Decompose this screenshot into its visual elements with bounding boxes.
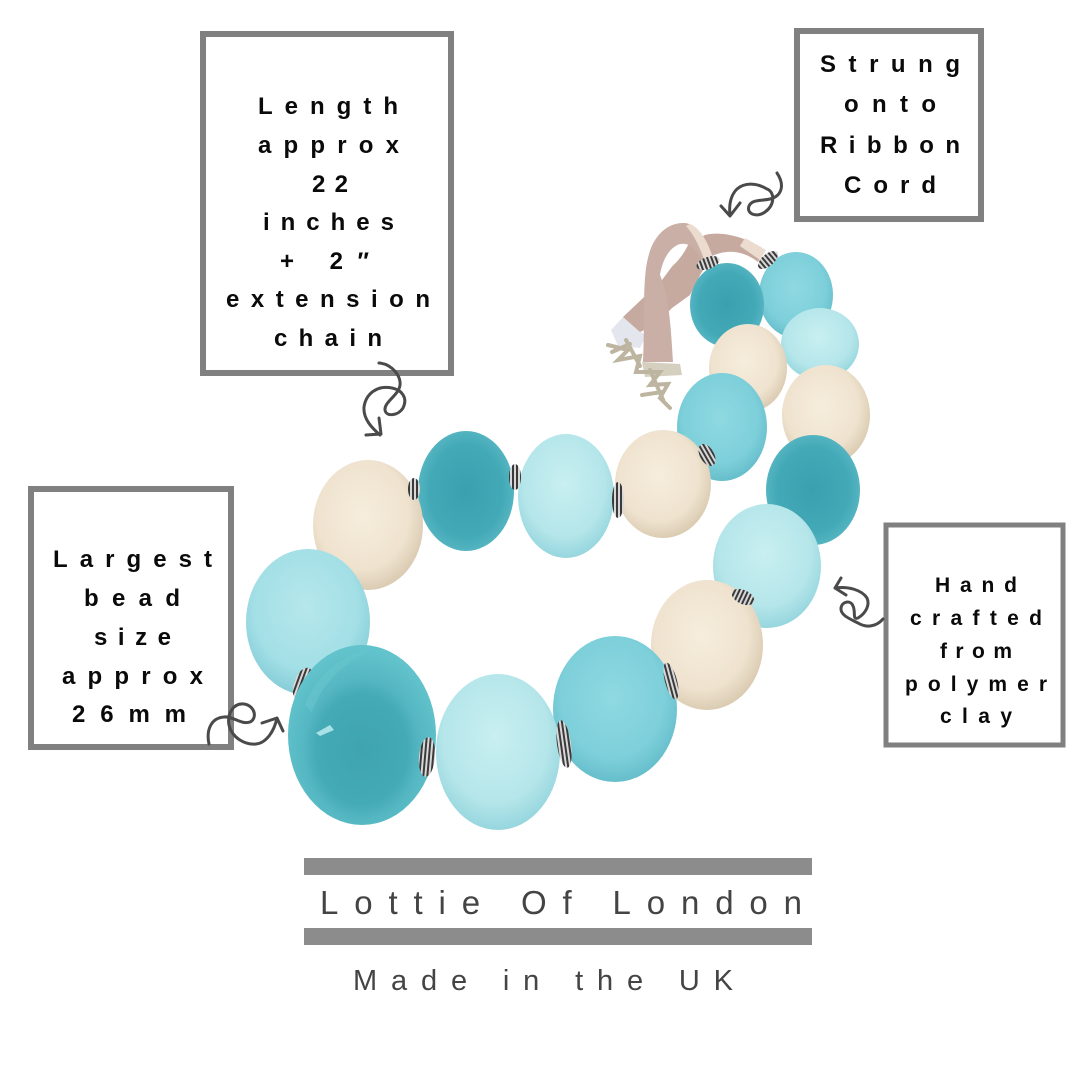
bead: cream left bbox=[313, 460, 423, 590]
callout box: length: inches bbox=[263, 209, 394, 236]
bead: teal right bbox=[766, 435, 860, 545]
callout box: ribbon cord: Strung bbox=[820, 51, 960, 78]
callout box: bead size bbox=[31, 489, 231, 747]
bead: teal inner bbox=[418, 431, 514, 551]
bead: mid blue bottom bbox=[553, 636, 677, 782]
top bar bbox=[304, 858, 812, 875]
bead: largest teal bbox=[288, 645, 436, 825]
spacer bead: behind largest bead bbox=[289, 665, 317, 703]
callout box: ribbon cord bbox=[797, 31, 981, 219]
bead: mid blue inner bbox=[677, 373, 767, 481]
bead: cream inner bbox=[615, 430, 711, 538]
brand block bbox=[304, 858, 812, 997]
bead: cream upper left bbox=[709, 324, 787, 412]
bead: pale left large bbox=[246, 549, 370, 695]
callout box: length bbox=[203, 34, 451, 373]
callout box: bead size: 26mm bbox=[72, 701, 186, 728]
tagline: Made in the UK bbox=[353, 965, 734, 997]
callout box: ribbon cord: Cord bbox=[844, 172, 936, 199]
arrow: to largest bead bbox=[208, 704, 283, 744]
callout box: length: extension bbox=[226, 286, 430, 313]
callout box: polymer clay: polymer bbox=[905, 673, 1047, 696]
callout box: bead size: Largest bbox=[53, 546, 212, 573]
necklace photo bbox=[246, 223, 870, 830]
bead: pale inner bbox=[518, 434, 614, 558]
callout box: polymer clay bbox=[886, 525, 1063, 745]
brand name: Lottie Of London bbox=[320, 884, 802, 921]
callout box: polymer clay: Hand bbox=[935, 574, 1017, 597]
callout box: bead size: size bbox=[94, 624, 171, 651]
spacer beads bbox=[408, 248, 781, 778]
bead: mid blue top bbox=[759, 252, 833, 338]
callout box: polymer clay: crafted bbox=[910, 607, 1042, 630]
arrow: to ribbon bbox=[721, 173, 781, 216]
callout box: bead size: bead bbox=[84, 585, 180, 612]
bead: cream lower right bbox=[651, 580, 763, 710]
ribbon cord and clasp bbox=[608, 223, 766, 408]
bottom bar bbox=[304, 928, 812, 945]
callout box: length: Length bbox=[258, 93, 398, 120]
bead: pale blue top bbox=[781, 308, 859, 380]
bead: cream upper right bbox=[782, 365, 870, 465]
callout box: polymer clay: from bbox=[940, 640, 1012, 663]
callout box: length: 22 bbox=[312, 171, 348, 198]
callout box: ribbon cord: onto bbox=[844, 91, 936, 118]
callout box: length: + 2″ bbox=[280, 248, 370, 275]
callout box: bead size: approx bbox=[62, 663, 204, 690]
bead: teal top bbox=[690, 263, 764, 347]
callout box: polymer clay: clay bbox=[940, 705, 1012, 728]
callout box: ribbon cord: Ribbon bbox=[820, 132, 960, 159]
arrow: to length box bbox=[364, 363, 405, 435]
callout box: length: approx bbox=[258, 132, 400, 159]
callout box: length: chain bbox=[274, 325, 382, 352]
bead: pale bottom bbox=[436, 674, 560, 830]
arrow: to clay bead bbox=[835, 578, 883, 626]
bead: pale right bbox=[713, 504, 821, 628]
